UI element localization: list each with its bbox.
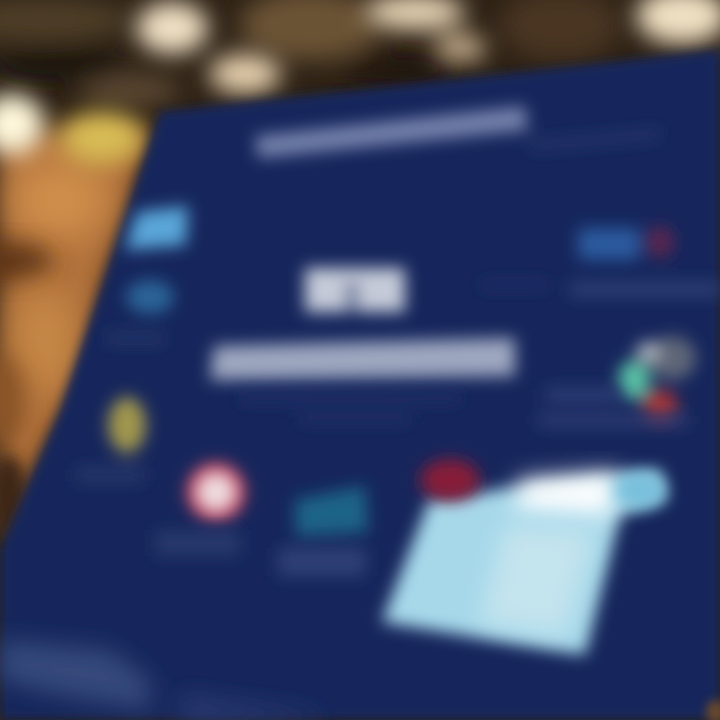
glasses highlights: [0, 94, 44, 154]
icon: teal chart: [278, 486, 368, 576]
cream highlights: [136, 0, 720, 94]
panel: light blue data table: [382, 470, 666, 655]
icon: small blue item on left: [105, 280, 174, 343]
heading: top title bar: [255, 106, 660, 158]
icon: pink and white circle: [155, 462, 246, 556]
text block: faint lines under subtitle: [240, 394, 460, 423]
text block: bottom left blurred lines: [0, 640, 320, 720]
icon: yellow bulb at left: [75, 397, 146, 482]
person: face on the left: [0, 94, 150, 540]
heading: central large title: [305, 268, 405, 312]
icon: dark red badge on table: [420, 459, 480, 501]
icon: top right blue and red badge: [480, 226, 720, 296]
corner: bottom right brown speck: [706, 700, 720, 720]
heading: central subtitle: [210, 338, 515, 380]
icon: multicolour circle chart at right: [618, 336, 696, 422]
icon: blue tag on left: [125, 206, 188, 250]
text block: right caption lines: [538, 388, 688, 426]
